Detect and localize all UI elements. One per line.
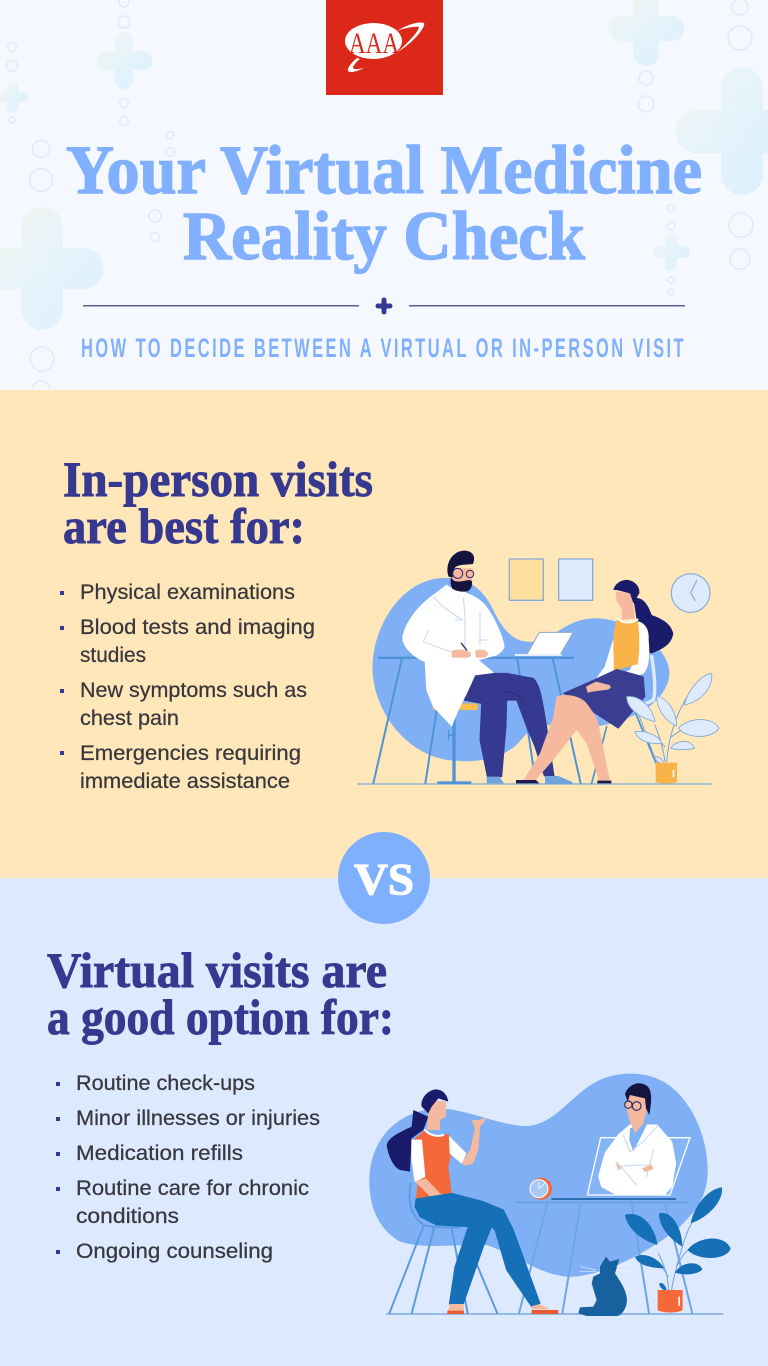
patient chair [592,657,656,783]
potted plant [627,673,719,783]
alarm clock [530,1178,552,1200]
illustration: virtual consultation [369,1074,731,1316]
laptop [515,632,573,656]
patient [516,580,673,783]
doctor stool [433,703,478,784]
list: in-person uses: New symptoms such as [80,679,307,702]
wall frames [509,559,593,600]
laptop with doctor [551,1083,690,1200]
list: in-person uses: Blood tests and imaging [80,616,315,639]
potted plant [625,1187,731,1312]
heading: in-person [63,451,373,554]
doctor [403,551,572,784]
desk [373,657,581,783]
decorative rings [6,0,753,399]
heading: virtual: Virtual visits are [47,942,387,998]
list: in-person uses [60,581,315,793]
list: in-person uses: immediate assistance [80,770,290,793]
illustration: doctor and patient in clinic [357,551,719,785]
list: virtual uses: Ongoing counseling [76,1240,273,1263]
title [66,132,702,274]
panel: virtual visits [0,878,768,1366]
floor line [386,1313,723,1315]
heading: in-person: are best for: [63,498,305,554]
list: virtual uses: Minor illnesses or injuries [76,1107,320,1130]
heading: virtual: a good option for: [47,989,394,1045]
woman [387,1089,558,1314]
title: Your Virtual Medicine [66,132,702,208]
heading: in-person: In-person visits [63,451,373,507]
cat [578,1257,632,1316]
logo: AAA: AAA [349,27,399,60]
heading: virtual [47,942,394,1045]
desk [515,1201,692,1313]
divider with plus [83,298,685,314]
list: in-person uses: Emergencies requiring [80,742,301,765]
list: in-person uses: chest pain [80,707,179,730]
doctor on screen [599,1083,676,1194]
list: virtual uses [56,1072,320,1263]
title: Reality Check [183,198,586,274]
logo: AAA [326,0,443,95]
VS badge: VS [354,855,414,904]
list: in-person uses: studies [80,644,146,667]
header panel [0,0,768,399]
list: virtual uses: Routine care for chronic [76,1177,309,1200]
panel: in-person visits [0,390,768,878]
decorative plus signs [0,0,768,330]
VS badge [338,832,430,924]
floor line [357,783,712,785]
list: virtual uses: Routine check-ups [76,1072,255,1095]
chair [389,1183,497,1313]
list: in-person uses: Physical examinations [80,581,295,604]
list: virtual uses: Medication refills [76,1142,243,1165]
wall clock [671,574,710,612]
list: virtual uses: conditions [76,1205,179,1228]
